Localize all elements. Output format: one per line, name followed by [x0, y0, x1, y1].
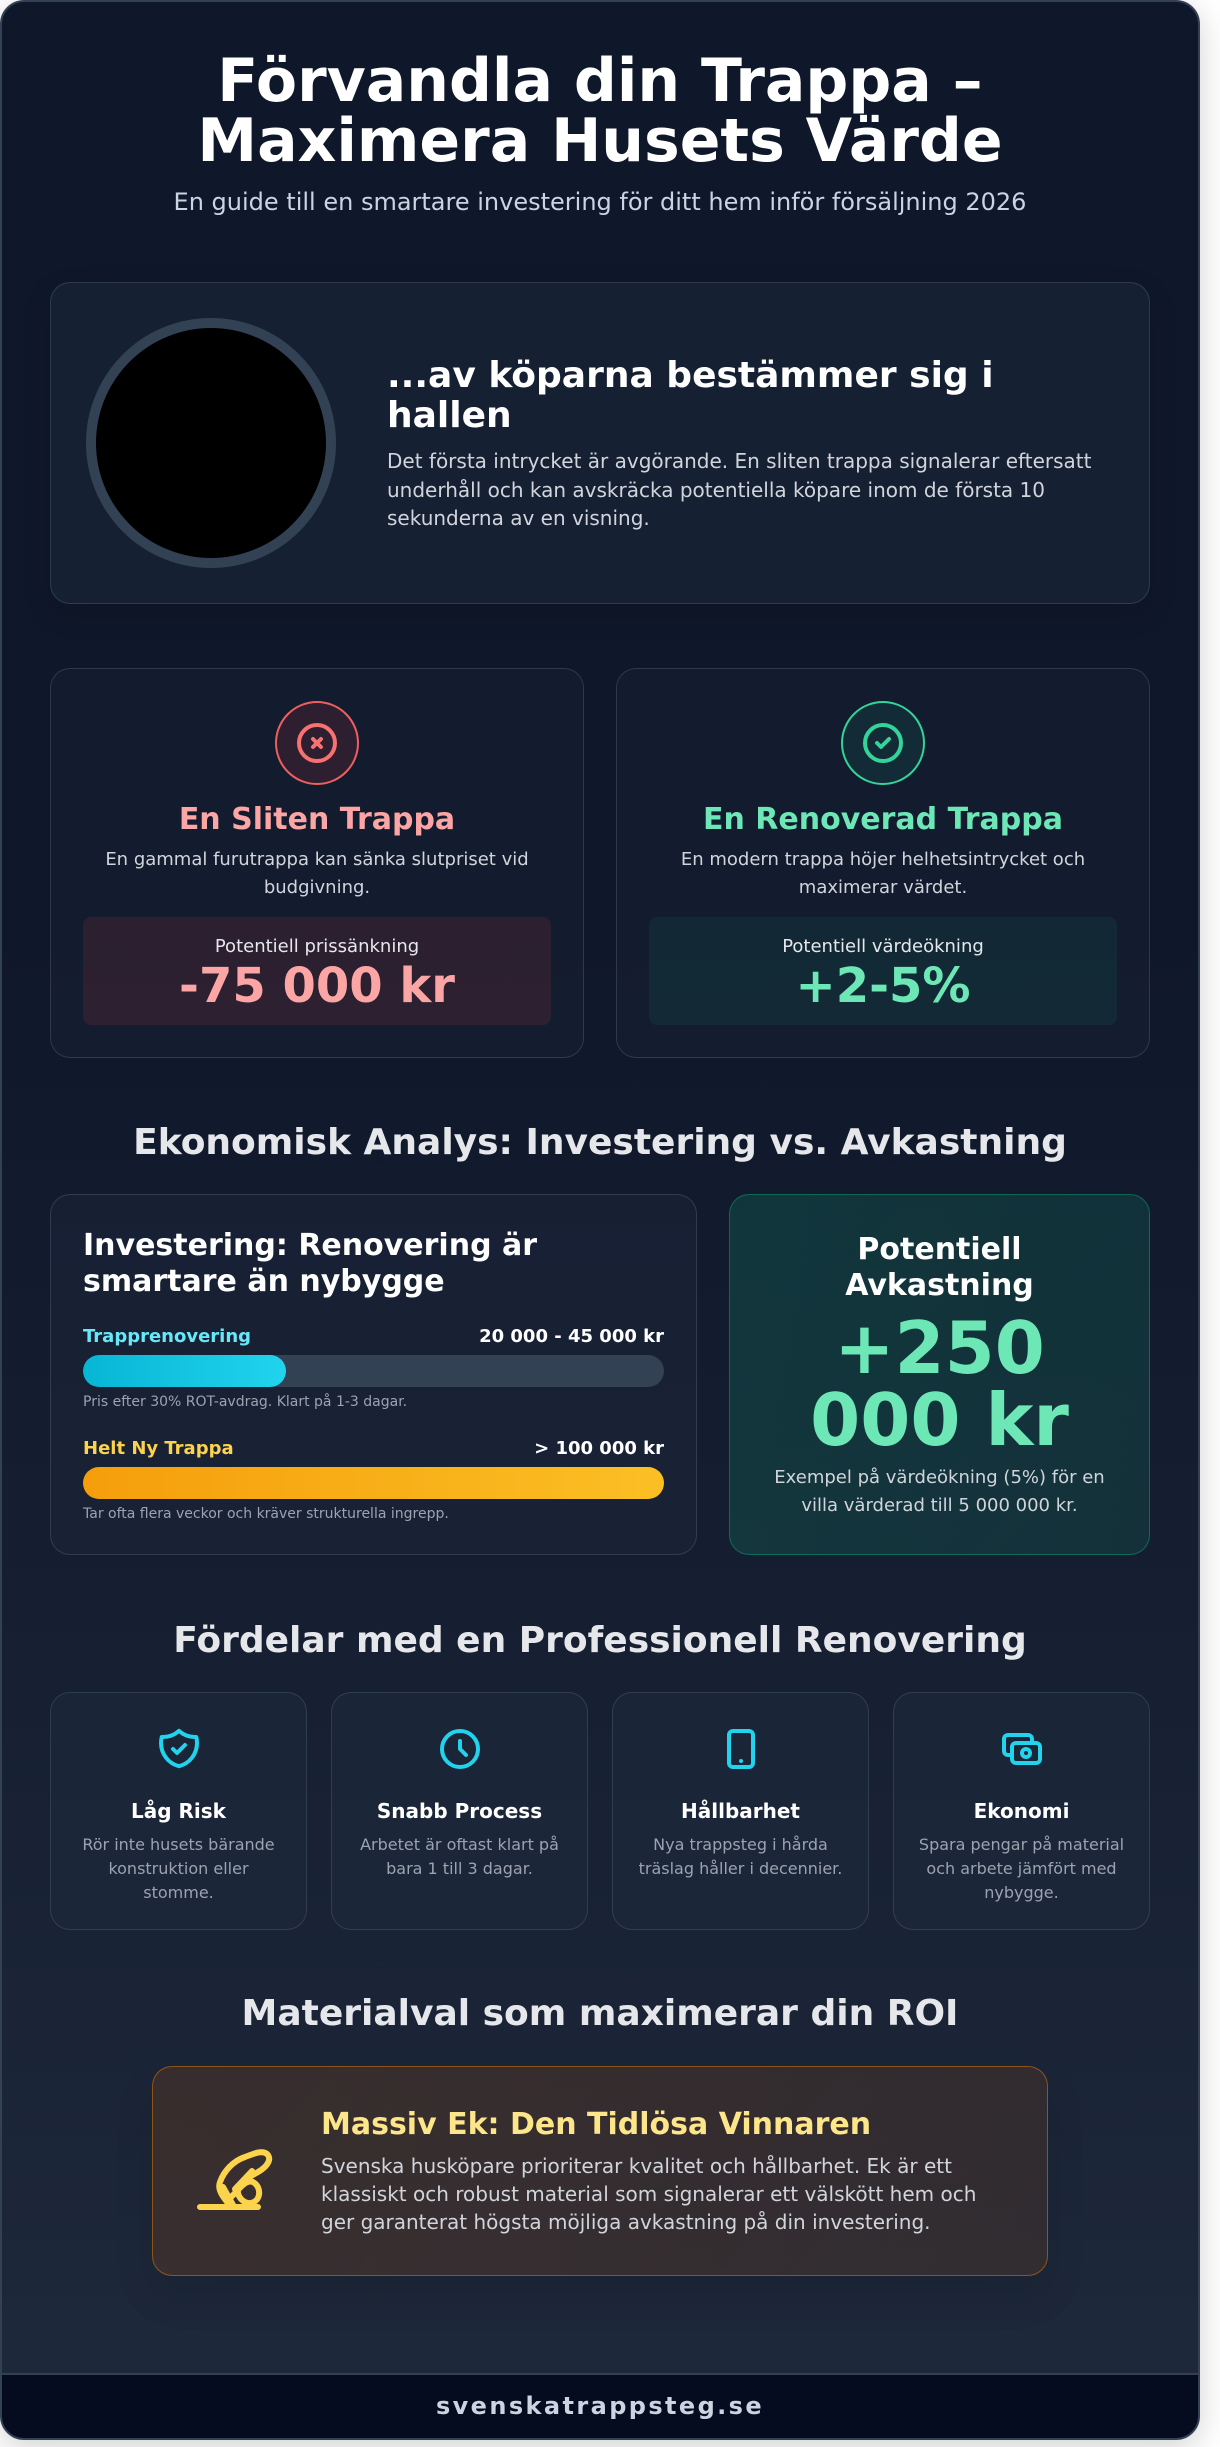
- section heading: benefits: Fördelar med en Professionell Renovering: [173, 1620, 1027, 1661]
- heading: Massiv Ek: Den Tidlösa Vinnaren: [321, 2107, 871, 2142]
- description: Rör inte husets bärande: [82, 1835, 275, 1854]
- description: [82, 1835, 275, 1902]
- price: 20 000 - 45 000 kr: [479, 1326, 664, 1347]
- panel: durability: [612, 1692, 869, 1930]
- description: Svenska husköpare prioriterar kvalitet och hållbarhet. Ek är ett: [321, 2154, 952, 2178]
- section heading: analysis: Ekonomisk Analys: Investering vs. Avkastning: [133, 1122, 1067, 1163]
- heading: [83, 1228, 537, 1299]
- icon: device: [727, 1729, 755, 1769]
- value: -75 000 kr: [179, 958, 455, 1014]
- description: stomme.: [143, 1883, 214, 1902]
- description: och arbete jämfört med: [926, 1859, 1117, 1878]
- description: träslag håller i decennier.: [639, 1859, 842, 1878]
- label: Trapprenovering: [83, 1326, 251, 1347]
- heading: Ekonomi: [974, 1799, 1069, 1823]
- bar: [83, 1467, 664, 1499]
- panel: fast process: [331, 1692, 588, 1930]
- panel: worn stair: [50, 668, 584, 1058]
- hero text: Det första intrycket är avgörande. En sliten trappa signalerar eftersatt: [387, 449, 1091, 473]
- title: Förvandla din Trappa –: [217, 46, 983, 116]
- value: +250: [834, 1306, 1045, 1390]
- note: Tar ofta flera veckor och kräver strukturella ingrepp.: [83, 1506, 449, 1522]
- footer text: svenskatrappsteg.se: [436, 2392, 764, 2420]
- heading: Snabb Process: [377, 1799, 542, 1823]
- value: 000 kr: [810, 1378, 1069, 1462]
- description: Spara pengar på material: [919, 1835, 1124, 1854]
- hero text: [387, 449, 1091, 530]
- subtitle: En guide till en smartare investering för ditt hem inför försäljning 2026: [174, 188, 1026, 216]
- icon: x circle: [275, 701, 359, 785]
- panel: solid oak: [152, 2066, 1048, 2276]
- bar: [83, 1355, 664, 1387]
- value: [810, 1306, 1069, 1462]
- description: nybygge.: [984, 1883, 1059, 1902]
- description: budgivning.: [264, 877, 370, 898]
- hero text: underhåll och kan avskräcka potentiella köpare inom de första 10: [387, 478, 1045, 502]
- heading: En Sliten Trappa: [179, 802, 455, 837]
- hero heading: [387, 355, 994, 436]
- heading: Låg Risk: [131, 1799, 226, 1823]
- description: [919, 1835, 1124, 1902]
- icon: cash: [1002, 1733, 1042, 1765]
- title: [197, 46, 1003, 176]
- description: Exempel på värdeökning (5%) för en: [774, 1467, 1105, 1488]
- heading: Avkastning: [845, 1268, 1034, 1303]
- label: Potentiell prissänkning: [215, 936, 419, 957]
- panel: investment comparison: [50, 1194, 697, 1555]
- description: En modern trappa höjer helhetsintrycket och: [681, 849, 1085, 870]
- bar chart: new stair: [82, 1438, 664, 1522]
- description: maximerar värdet.: [799, 877, 967, 898]
- icon: shield: [159, 1728, 199, 1768]
- bar chart: renovation: [83, 1326, 664, 1410]
- description: [105, 849, 529, 898]
- image circle: [86, 318, 336, 568]
- note: Pris efter 30% ROT-avdrag. Klart på 1-3 dagar.: [83, 1394, 407, 1410]
- panel: low risk: [50, 1692, 307, 1930]
- title: Maximera Husets Värde: [197, 106, 1003, 176]
- description: bara 1 till 3 dagar.: [386, 1859, 533, 1878]
- description: [774, 1467, 1105, 1516]
- panel: renovated stair: [616, 668, 1150, 1058]
- description: [639, 1835, 842, 1878]
- panel: potential return: [729, 1194, 1150, 1555]
- description: Nya trappsteg i hårda: [653, 1835, 828, 1854]
- description: [360, 1835, 559, 1878]
- heading: Investering: Renovering är: [83, 1228, 537, 1263]
- price: > 100 000 kr: [534, 1438, 664, 1459]
- heading: Hållbarhet: [681, 1799, 800, 1823]
- value box: [83, 917, 551, 1025]
- description: [321, 2154, 976, 2234]
- footer: [0, 2373, 1200, 2440]
- heading: [845, 1232, 1034, 1303]
- icon: wood: [197, 2149, 272, 2210]
- description: [681, 849, 1085, 898]
- heading: Potentiell: [857, 1232, 1022, 1267]
- value: +2-5%: [795, 958, 971, 1014]
- description: ger garanterat högsta möjliga avkastning på din investering.: [321, 2210, 931, 2234]
- panel: economy: [893, 1692, 1150, 1930]
- icon: check circle: [841, 701, 925, 785]
- label: Helt Ny Trappa: [83, 1438, 234, 1459]
- value box: [649, 917, 1117, 1025]
- description: Arbetet är oftast klart på: [360, 1835, 559, 1854]
- hero text: sekunderna av en visning.: [387, 506, 650, 530]
- section heading: material: Materialval som maximerar din ROI: [242, 1993, 958, 2034]
- description: villa värderad till 5 000 000 kr.: [801, 1495, 1078, 1516]
- panel: first impression: [50, 282, 1150, 604]
- description: klassiskt och robust material som signalerar ett välskött hem och: [321, 2182, 976, 2206]
- heading: En Renoverad Trappa: [703, 802, 1063, 837]
- icon: clock: [440, 1729, 480, 1769]
- label: Potentiell värdeökning: [782, 936, 984, 957]
- description: konstruktion eller: [108, 1859, 249, 1878]
- hero heading: ...av köparna bestämmer sig i: [387, 355, 994, 396]
- heading: smartare än nybygge: [83, 1264, 445, 1299]
- hero heading: hallen: [387, 395, 512, 436]
- description: En gammal furutrappa kan sänka slutpriset vid: [105, 849, 529, 870]
